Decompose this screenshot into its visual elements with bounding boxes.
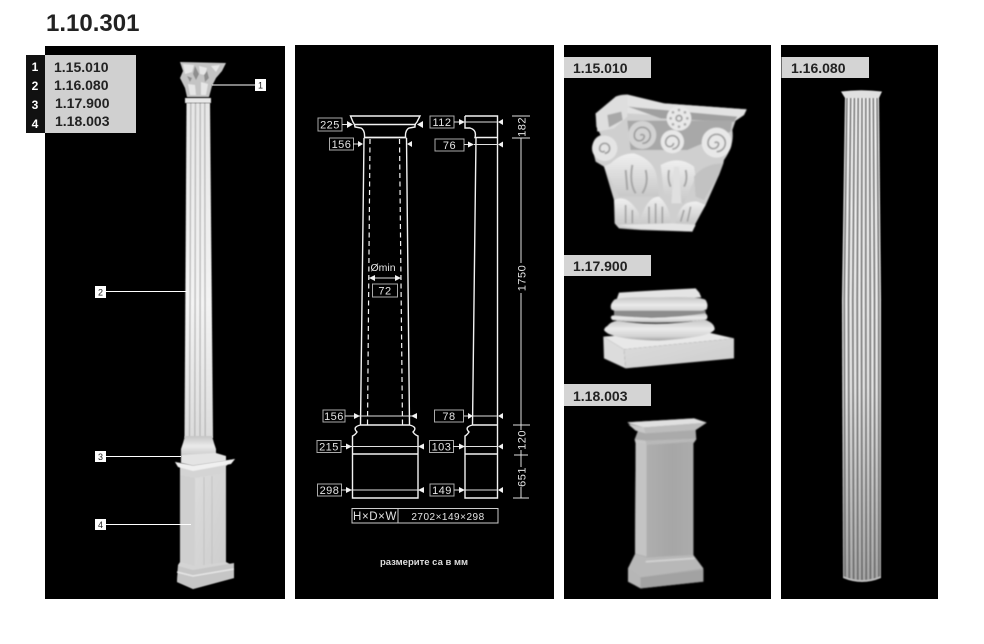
legend: part codes: 4	[32, 117, 39, 131]
legend: part codes: 2	[32, 79, 39, 93]
leader 3	[95, 451, 181, 462]
dimension: minimum diameter 72: 72	[378, 286, 392, 298]
dimension: 112	[430, 116, 503, 129]
rosette	[667, 106, 691, 131]
icon: fluted shaft	[841, 90, 882, 582]
panel: assembled column	[45, 46, 285, 599]
panel: technical drawing	[295, 45, 554, 599]
overall height dimensions: 651	[516, 467, 528, 487]
dimension: 78	[434, 410, 503, 423]
leader 1: 1	[258, 80, 263, 90]
icon: pedestal	[627, 418, 707, 588]
dimension: 76	[435, 139, 503, 152]
label 1.17.900: 1.17.900	[573, 258, 628, 274]
label 1.17.900	[564, 255, 651, 276]
icon: capital	[592, 95, 747, 232]
legend: part codes: 1.15.010	[54, 59, 109, 75]
legend: part codes: 1.18.003	[55, 113, 110, 129]
legend: part codes: 3	[32, 98, 39, 112]
dimension: 149: 149	[432, 485, 452, 497]
legend: part codes: 1.17.900	[55, 95, 110, 111]
leader 2	[95, 286, 187, 298]
overall height dimensions: 120	[516, 430, 528, 450]
dimension: 156 bottom	[323, 410, 417, 423]
dimension: 76: 76	[443, 140, 456, 152]
side elevation outline	[465, 116, 498, 498]
legend: part codes: 1.16.080	[54, 77, 109, 93]
dimension: 112: 112	[432, 117, 452, 129]
icon: base	[603, 288, 734, 368]
label 1.18.003	[564, 384, 651, 406]
leader 3: 3	[98, 452, 103, 462]
acanthus leaves	[604, 153, 723, 232]
leader 1	[212, 79, 266, 91]
dimension: 156 top: 156	[332, 139, 351, 151]
leader 4: 4	[98, 520, 103, 530]
overall size table: H×D×W	[353, 511, 397, 523]
legend: part codes	[26, 55, 136, 133]
scrolls	[592, 121, 732, 161]
dimension: 156 bottom: 156	[324, 411, 344, 423]
label 1.16.080: 1.16.080	[791, 60, 846, 76]
icon: assembled column base	[181, 436, 226, 466]
dimension: 103: 103	[432, 442, 451, 454]
dimension: 78: 78	[442, 411, 456, 423]
dimension: 298	[318, 484, 424, 497]
dimension: 156 top	[330, 138, 412, 151]
legend: part codes: 1	[32, 60, 39, 74]
title: 1.10.301	[46, 10, 139, 37]
dimension: 215: 215	[319, 442, 339, 454]
overall height dimensions	[512, 116, 530, 498]
overall height dimensions: 1750	[516, 265, 528, 291]
dimension: 225: 225	[320, 120, 340, 132]
label 1.15.010	[564, 57, 651, 78]
panel: component photos	[564, 45, 771, 599]
overall size table: 2702×149×298	[411, 512, 485, 523]
label 1.16.080	[782, 57, 869, 78]
dimension: 149	[430, 484, 503, 497]
dimension: 103	[430, 440, 503, 454]
dimension: minimum diameter 72: Ømin	[370, 262, 396, 274]
label 1.15.010: 1.15.010	[573, 60, 628, 76]
dimension: minimum diameter 72	[369, 262, 401, 298]
icon: assembled column capital	[180, 62, 226, 103]
dimension: 225	[318, 118, 423, 132]
dimension: 215	[317, 440, 424, 454]
front elevation outline	[350, 116, 420, 498]
overall height dimensions: 182	[516, 117, 528, 137]
label 1.18.003: 1.18.003	[573, 388, 628, 404]
icon: assembled column shaft	[184, 103, 213, 438]
overall size table	[352, 508, 498, 523]
icon: assembled pedestal	[175, 459, 235, 589]
panel: shaft photo	[781, 45, 938, 599]
leader 2: 2	[98, 288, 103, 298]
units note: размерите са в мм	[380, 557, 468, 568]
leader 4	[95, 519, 191, 530]
dimension: 298: 298	[320, 485, 339, 497]
